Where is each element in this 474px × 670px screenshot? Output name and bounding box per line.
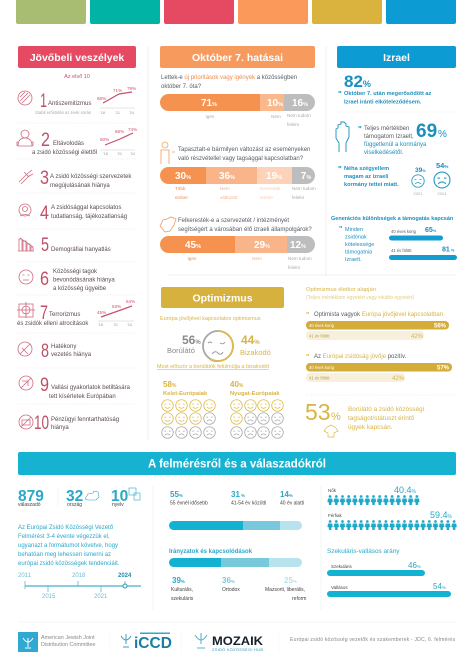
- question 2: változott: [220, 195, 238, 200]
- question 3: 29%: [254, 240, 270, 251]
- threat 4: tudatlanság, tájékozatlanság: [51, 214, 127, 220]
- heading: Október 7. hatásai: Október 7. hatásai: [192, 52, 283, 64]
- stat 82%: Október 7. után megerősödött az: [344, 91, 432, 97]
- shame statement with faces: kormány tettei miatt.: [344, 182, 399, 188]
- heading: Izrael: [337, 46, 456, 68]
- threat 6: [19, 269, 115, 292]
- question 3: Igen: [188, 256, 197, 261]
- logo: ICCD: [121, 632, 172, 652]
- panel: age breakdown: 40 év alatti: [280, 500, 304, 506]
- bars: Optimista vagyok: 42%: [411, 334, 424, 340]
- panel: age breakdown: 31 %: [231, 490, 245, 499]
- question 2: ember: [175, 195, 188, 200]
- threat 5: 5: [41, 235, 49, 256]
- bars: Optimista vagyok: [306, 312, 449, 340]
- threat 5: Demográfiai hanyatlás: [51, 247, 111, 253]
- bars: Optimista vagyok: 56%: [434, 324, 447, 330]
- question 1: Nem tudom: [287, 113, 311, 118]
- threat 8: Hatékony: [51, 344, 76, 350]
- question 2: való részvétellel vagy tagsággal kapcsolatban?: [178, 156, 304, 162]
- threat 1: 1: [40, 91, 47, 112]
- bars: Optimista vagyok: 40 éves korig: [309, 323, 335, 328]
- stat: 10 nyelv: [111, 488, 140, 508]
- bars: Európai zsidóság jövője: [306, 354, 452, 382]
- threat 7: 45%: [97, 310, 106, 315]
- threat 3: 3: [40, 168, 49, 189]
- stat 69% with hand icon: Teljes mértékben: [364, 126, 409, 132]
- generational differences: kötelessége: [345, 242, 374, 248]
- question 3: [160, 217, 315, 270]
- question 2: Nem tudom: [292, 186, 316, 191]
- threat 2: '18: [103, 152, 108, 156]
- threat 1: '21: [115, 111, 120, 115]
- panel: age breakdown: 14%: [280, 490, 293, 499]
- threat 1: 66%: [97, 96, 106, 101]
- threat 2: 50%: [100, 137, 109, 142]
- stat 69% with hand icon: támogatom Izraelt,: [364, 134, 414, 140]
- generational differences: ": [339, 226, 342, 233]
- panel: Szekuláris-vallásos arány: 54%: [433, 582, 446, 591]
- threat 7: '18: [98, 323, 103, 327]
- callout: Most először a borúlátók felülmúlja a bizakodót: [157, 364, 270, 370]
- threat 4: 4: [40, 203, 49, 224]
- panel: irányzatok: 36%: [222, 576, 235, 585]
- logo: JDC: American Jewish Joint: [41, 635, 95, 641]
- face grid: Nyugat-Európaiak: [230, 380, 283, 438]
- donut pessimist vs optimist: 44%: [241, 333, 260, 347]
- threat 2: [17, 127, 137, 156]
- generational differences: Izraelt.: [345, 257, 362, 263]
- timeline: 2021: [94, 594, 108, 600]
- heading: Izrael: Izrael: [383, 52, 410, 64]
- panel: optimism by age: [305, 287, 456, 437]
- bars: Optimista vagyok: Optimista vagyok Európa jövőjével kapcsolatban.: [314, 312, 445, 318]
- threat 7: [17, 299, 135, 327]
- stat 53%: 53: [305, 399, 331, 425]
- panel: age breakdown: [169, 490, 304, 530]
- question 2: Tapasztalt-e bármilyen változást az eseményeken: [178, 147, 310, 153]
- threat 8: [18, 341, 92, 362]
- stat 82%: Izrael iránti elköteleződésem.: [344, 100, 422, 106]
- shame statement with faces: 2024: [438, 191, 447, 196]
- description: [18, 525, 120, 567]
- threat 6: a közösség ügyeibe: [53, 286, 107, 292]
- stat 82%: 82%: [344, 72, 371, 91]
- stat: 32 ország: 32: [66, 488, 83, 505]
- panel: irányzatok: Ortodox: [222, 587, 240, 593]
- threat 4: A zsidósággal kapcsolatos: [51, 205, 121, 211]
- question 3: 12%: [290, 240, 306, 251]
- threat 7: 53%: [112, 304, 121, 309]
- threat 1: 79%: [127, 86, 136, 91]
- panel: Szekuláris-vallásos arány: [327, 548, 451, 597]
- shame statement with faces: ": [338, 165, 342, 174]
- threat 5: [18, 235, 111, 256]
- panel: irányzatok: szekuláris: [171, 596, 194, 602]
- stat 53%: %: [331, 411, 341, 423]
- panel: Izrael: [331, 46, 457, 263]
- generational differences: zsidónak: [345, 234, 367, 240]
- question 3: felelni: [288, 265, 300, 270]
- stat: 10 nyelv: nyelv: [112, 502, 124, 508]
- timeline: 2018: [72, 573, 86, 579]
- face grid: Kelet-Európaiak: 58%: [163, 380, 177, 389]
- question 3: 45%: [185, 240, 201, 251]
- bars: Optimista vagyok: ": [306, 312, 309, 319]
- banner: A felmérésről és a válaszadókról: [18, 452, 456, 475]
- threat 7: 7: [40, 303, 48, 324]
- description: ugyanazt a formátumot követve, hogy: [18, 543, 118, 549]
- face grid: Kelet-Európaiak: [162, 380, 215, 438]
- panel: Október 7. hatásai: [160, 46, 456, 275]
- donut pessimist vs optimist: [167, 331, 271, 361]
- threat 1: Stabil erősödés az évek során: [35, 110, 92, 115]
- threat 8: vezetés hiánya: [51, 352, 92, 358]
- column separators: [148, 46, 326, 440]
- stat 82%: ": [338, 90, 342, 99]
- threat 2: '24: [130, 152, 135, 156]
- question 2: Nem: [220, 186, 230, 191]
- threat 7: '21: [113, 323, 118, 327]
- question 1: [160, 75, 315, 127]
- stat 69% with hand icon: függetlenül a kormánya: [364, 142, 427, 148]
- question 2: Több: [175, 186, 186, 191]
- bars: Európai zsidóság jövője: ": [306, 354, 309, 361]
- question 1: Nem: [271, 114, 281, 119]
- generational differences: Minden: [345, 227, 363, 233]
- threat 8: 8: [41, 341, 49, 362]
- threat 9: [19, 375, 131, 400]
- generational differences: [331, 216, 457, 263]
- stat: 879 válaszadó: 879: [18, 488, 44, 505]
- threat 3: A zsidó közösségi szervezetek: [50, 174, 132, 180]
- stat 53%: Borúlátó a zsidó közösségi: [348, 406, 424, 413]
- panel: irányzatok: Mazsorti, liberális,: [265, 587, 305, 593]
- source note: Európai zsidó közösség vezetők és szakemberek - JDC, 6. felmérés: [290, 637, 455, 643]
- shame statement with faces: 2021: [414, 191, 423, 196]
- stat: 10 nyelv: 10: [111, 488, 128, 505]
- threat 2: a zsidó közösségi élettől: [32, 150, 97, 156]
- threat 6: Közösségi tagok: [53, 269, 98, 275]
- stat: 32 ország: [66, 488, 99, 508]
- generational differences: 40 éves korig: [391, 229, 417, 234]
- threat 1: 71%: [113, 88, 122, 93]
- logo: Mozaik: ZSIDÓ KÖZÖSSÉGI HUB: [212, 647, 263, 652]
- stat 69% with hand icon: 69: [416, 121, 437, 142]
- panel: age breakdown: 55%: [170, 490, 183, 499]
- header colour tabs: [16, 0, 456, 24]
- threat 7: 64%: [126, 299, 135, 304]
- generational differences: 81 %: [442, 246, 455, 254]
- threat 6: bevonódásának hiánya: [53, 278, 115, 284]
- face grid: Nyugat-Európaiak: Nyugat-Európaiak: [230, 391, 280, 397]
- question 3: Nem: [252, 256, 262, 261]
- question 1: felelni: [287, 122, 299, 127]
- threat 2: 66%: [115, 129, 124, 134]
- heading: Október 7. hatásai: [160, 46, 315, 68]
- subheading: [306, 287, 414, 301]
- question 2: ember: [260, 195, 273, 200]
- question 1: 16%: [292, 98, 308, 109]
- panel: Jövőbeli veszélyek: [17, 46, 137, 434]
- threat 2: '21: [117, 152, 122, 156]
- logo: ICCD: iCCD: [134, 635, 172, 652]
- generational differences: 65%: [425, 227, 437, 234]
- generational differences: 41 év fölött: [391, 248, 412, 253]
- question 2: felelni: [292, 195, 304, 200]
- face grid: Nyugat-Európaiak: 40%: [230, 380, 244, 389]
- panel: gender pictogram: Férfiak: [328, 513, 343, 518]
- panel: gender pictogram: [327, 485, 457, 530]
- subheading: Az első 10: [64, 74, 90, 80]
- timeline: 2011: [18, 573, 32, 579]
- question 2: 36%: [219, 171, 235, 182]
- stat 69% with hand icon: [336, 121, 447, 156]
- stat: 32 ország: ország: [67, 502, 82, 508]
- threat 7: '24: [127, 323, 132, 327]
- question 2: [160, 142, 316, 200]
- threat 10: Pénzügyi fenntarthatóság: [51, 417, 119, 423]
- question 2: 19%: [266, 171, 282, 182]
- stat 69% with hand icon: viselkedésétől.: [364, 150, 404, 156]
- description: Felmérést 3-4 évente végezzük el,: [18, 534, 110, 540]
- shame statement with faces: 54%: [436, 161, 448, 170]
- threat 10: hiánya: [51, 425, 69, 431]
- description: behatóan meg lehessen ismerni az: [18, 552, 111, 558]
- threat 2: 74%: [128, 127, 137, 132]
- question 1: Lettek-e új prioritások vagy igények a közösségben: [161, 75, 297, 81]
- bars: Európai zsidóság jövője: 57%: [437, 366, 450, 372]
- question 3: segítségért a városában élő izraeli állampolgárok?: [178, 227, 312, 233]
- question 1: 10%: [267, 98, 283, 109]
- question 3: Felkeresték-e a szervezetét / intézményét: [178, 218, 289, 224]
- threat 3: megújulásának hiánya: [50, 183, 110, 189]
- threat 10: [19, 413, 119, 434]
- face grid: Kelet-Európaiak: Kelet-Európaiak: [163, 391, 208, 397]
- generational differences: támogatnia: [345, 250, 373, 256]
- threat 6: 6: [40, 269, 49, 290]
- shame statement with faces: Néha szégyellem: [344, 166, 389, 172]
- subheading: Optimizmus életkor alapján: [306, 287, 376, 293]
- question 3: Nem tudom: [288, 256, 312, 261]
- donut pessimist vs optimist: Borúlátó: [167, 346, 195, 355]
- panel: irányzatok: reform: [292, 596, 306, 602]
- question 2: Kevesebb: [260, 186, 281, 191]
- timeline: [18, 573, 141, 600]
- panel: gender pictogram: 40.4%: [394, 485, 417, 495]
- panel: age breakdown: 55 évnél idősebb: [170, 500, 208, 506]
- threat 7: és zsidók elleni atrocitások: [17, 321, 89, 327]
- panel: gender pictogram: 59.4%: [430, 510, 453, 520]
- panel: Szekuláris-vallásos arány: Szekuláris-vallásos arány: [327, 548, 400, 555]
- threat 1: Antiszemitizmus: [48, 101, 91, 107]
- question 1: Igen: [206, 114, 215, 119]
- subheading: Európa jövőjével kapcsolatos optimizmus: [160, 316, 261, 322]
- bars: Európai zsidóság jövője: 42%: [392, 376, 405, 382]
- subheading: (Teljes mértékben egyetért vagy inkább egyetért): [306, 295, 414, 301]
- logo: Mozaik: [195, 633, 264, 652]
- heading: Jövőbeli veszélyek: [18, 46, 136, 68]
- stat: 879 válaszadó: válaszadó: [18, 502, 41, 508]
- logo: Mozaik: MOZAIK: [212, 636, 264, 648]
- timeline: 2024: [118, 573, 132, 579]
- threat 10: 10: [34, 413, 49, 434]
- banner: A felmérésről és a válaszadókról: A felmérésről és a válaszadókról: [148, 458, 326, 470]
- stat 53%: ügyek kapcsán.: [348, 424, 393, 431]
- threat 3: [19, 168, 132, 189]
- footer logos: [18, 630, 455, 654]
- panel: Szekuláris-vallásos arány: Vallásos: [331, 585, 348, 590]
- shame statement with faces: magam az izraeli: [344, 174, 389, 180]
- threat 1: [18, 86, 136, 115]
- question 2: 7%: [301, 171, 311, 182]
- logo: JDC: [18, 632, 96, 652]
- description: Az Európai Zsidó Közösségi Vezető: [18, 525, 114, 531]
- shame statement with faces: [338, 161, 450, 196]
- heading: Jövőbeli veszélyek: Jövőbeli veszélyek: [30, 52, 124, 64]
- panel: Optimizmus: [157, 287, 284, 438]
- panel: survey facts: [18, 488, 141, 600]
- panel: age breakdown: 41-54 év közötti: [231, 500, 266, 506]
- stat 53%: [305, 399, 424, 437]
- bars: Optimista vagyok: 41 év fölött: [309, 334, 330, 338]
- question 1: 71%: [201, 98, 217, 109]
- panel: Szekuláris-vallásos arány: Szekuláris: [331, 564, 353, 569]
- panel: irányzatok: 25%: [284, 576, 297, 585]
- timeline: 2015: [42, 594, 56, 600]
- logo: JDC: Distribution Committee: [41, 642, 96, 648]
- heading: Optimizmus: [161, 287, 284, 308]
- donut pessimist vs optimist: Bizakodó: [240, 348, 271, 357]
- stat 82%: [338, 72, 432, 106]
- heading: Optimizmus: Optimizmus: [192, 292, 253, 304]
- stat 53%: tagságot/státuszt érintő: [348, 415, 415, 422]
- stat 69% with hand icon: %: [438, 129, 447, 140]
- generational differences: Generációs különbségek a támogatás kapcsán: [331, 216, 454, 222]
- threat 7: Terrorizmus: [49, 312, 80, 318]
- donut pessimist vs optimist: 56%: [182, 333, 201, 347]
- panel: gender pictogram: Nők: [328, 488, 337, 493]
- panel: irányzatok: Kulturális,: [171, 587, 193, 593]
- bars: Európai zsidóság jövője: Az Európai zsidóság jövője pozitív.: [314, 354, 407, 360]
- threat 9: 9: [40, 375, 49, 396]
- question 2: 30%: [175, 171, 191, 182]
- stat 69% with hand icon: ": [358, 125, 362, 134]
- description: európai zsidó közösségek tendenciáit.: [18, 561, 120, 567]
- bars: Európai zsidóság jövője: 40 éves korig: [309, 365, 335, 370]
- threat 1: '24: [129, 111, 134, 115]
- panel: Szekuláris-vallásos arány: 46%: [408, 561, 421, 570]
- threat 9: Vallási gyakorlatok betiltására: [51, 385, 131, 391]
- threat 2: 2: [41, 130, 50, 151]
- threat 1: '18: [100, 111, 105, 115]
- bars: Európai zsidóság jövője: 41 év fölött: [309, 376, 330, 380]
- shame statement with faces: 39%: [415, 167, 426, 174]
- threat 4: [19, 203, 127, 224]
- panel: irányzatok: Irányzatok és kapcsolódások: [169, 549, 253, 555]
- question 1: október 7. óta?: [161, 84, 202, 90]
- threat 2: Eltávolodás: [53, 141, 84, 147]
- threat 9: tett kísérletek Európában: [49, 394, 116, 400]
- panel: irányzatok: [169, 549, 306, 602]
- panel: irányzatok: 39%: [172, 576, 185, 585]
